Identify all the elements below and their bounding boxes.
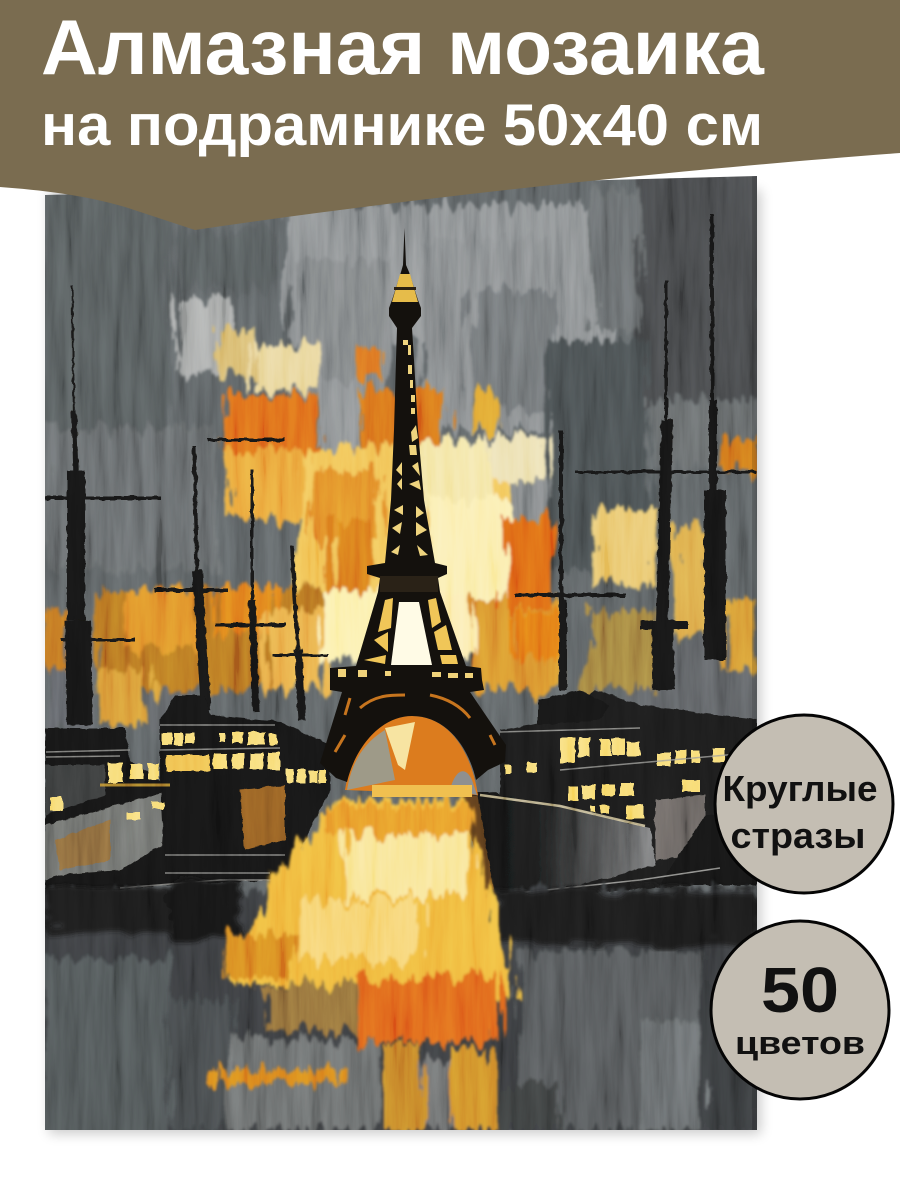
centre ship	[160, 695, 330, 885]
Eiffel tower	[320, 228, 506, 797]
reflection of the tower in water	[212, 800, 515, 1130]
far left ship	[45, 728, 165, 900]
right foreground hull	[472, 792, 656, 892]
grey sky brush strokes	[45, 176, 757, 578]
badge: 50 colours: цветов	[735, 1025, 865, 1061]
tower silhouette	[320, 228, 506, 782]
title line 1: Алмазная мозаика	[41, 3, 765, 91]
lit ship windows	[50, 732, 725, 820]
painting background	[45, 170, 757, 1130]
badge: round rhinestones: стразы	[730, 815, 866, 856]
canvas side edge	[752, 176, 757, 1130]
tower top light	[392, 274, 418, 302]
badge: 50 colours	[711, 921, 889, 1099]
tall ship masts	[45, 215, 757, 725]
tower leg lattice	[364, 598, 458, 664]
title line 2: на подрамнике 50х40 см	[41, 93, 763, 158]
canvas shadow	[49, 190, 761, 1134]
ship superstructures and hulls	[45, 690, 757, 902]
tower lattice windows	[391, 340, 428, 556]
dark water band	[45, 880, 757, 945]
title banner	[0, 0, 900, 230]
right background ship	[500, 690, 757, 900]
arch girder highlights	[335, 695, 495, 752]
badge: round rhinestones: Круглые	[722, 768, 878, 809]
orange and yellow glow	[45, 330, 760, 725]
platform railing and light	[338, 669, 473, 678]
deck highlight lines	[46, 725, 760, 900]
water	[30, 890, 770, 1140]
badge: round rhinestones	[715, 715, 893, 893]
arch sky	[345, 716, 478, 797]
badge: 50 colours: 50	[761, 954, 839, 1026]
painterly streak texture	[45, 170, 757, 1130]
tower central opening	[391, 602, 432, 665]
painting: Eiffel tower and ships	[30, 170, 770, 1140]
